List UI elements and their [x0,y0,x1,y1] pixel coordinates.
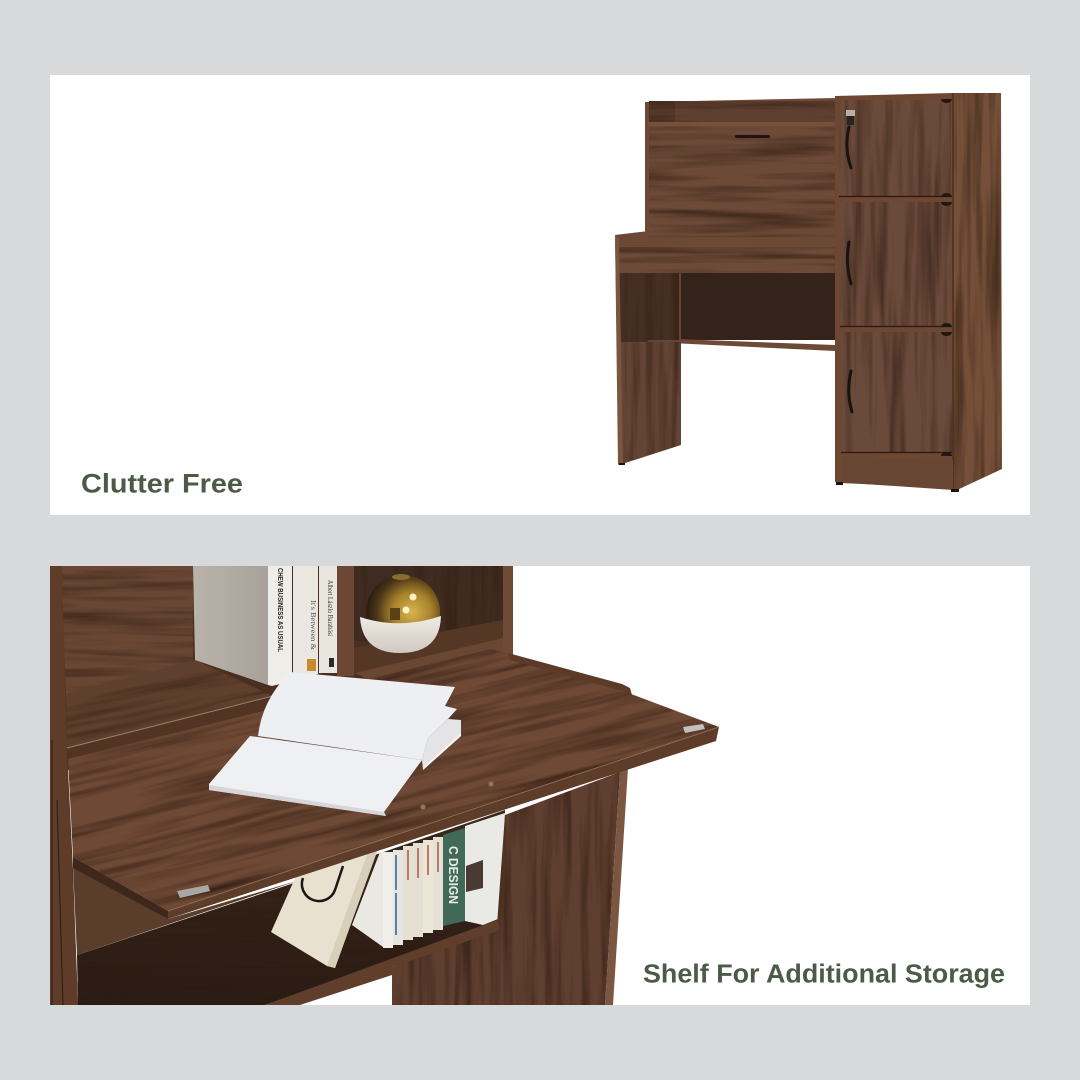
drop-down desk top [68,649,720,919]
tilted book [271,849,378,968]
open book [209,672,461,816]
feet [619,463,959,492]
books on lower shelf: C DESIGN [446,846,461,904]
desk product photo [615,93,1002,492]
door handles [847,127,852,412]
desk ledge and front rail [615,231,835,273]
left post [50,566,78,1005]
fold-down flap door [649,126,835,237]
hutch shelf [66,660,272,758]
books on lower shelf [271,813,505,968]
grey box file and books: Albert Lászlo Barabási [326,580,334,636]
desk close-up photo [50,566,720,1005]
grey box file and books: CHEW BUSINESS AS USUAL [276,568,283,653]
heading: clutter free: Clutter Free [81,468,243,498]
heading: shelf for additional storage: Shelf For Additional Storage [643,960,1005,988]
cabinet doors [839,100,952,452]
right niche with shelf [337,566,513,682]
shelf front edge [265,920,500,1005]
post seam [52,740,63,1005]
upper hutch back wall [61,566,196,696]
grey box file and books: It's Between & [309,600,317,651]
panel: clutter free [50,75,1030,515]
panel: shelf for additional storage [50,566,1030,1005]
lock [846,110,855,125]
left desk leg [615,235,681,466]
back rail [508,653,632,695]
grey box file and books [193,566,337,686]
underlay [50,566,513,1005]
under-flap side wall and dark shelf [73,810,507,1005]
screws [420,782,494,810]
hinge plates [177,885,210,898]
cabinet plinth [841,456,953,488]
open cavity under desk [648,273,835,351]
hinges [941,99,952,456]
flap handle [735,135,770,138]
hutch top recess [645,98,836,238]
gold ball in white bowl [360,574,441,653]
cabinet tower [619,93,1002,492]
right desk leg [392,768,628,1006]
